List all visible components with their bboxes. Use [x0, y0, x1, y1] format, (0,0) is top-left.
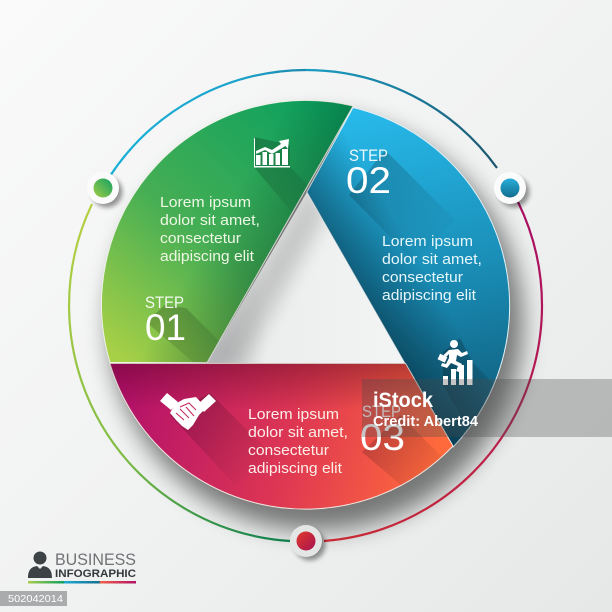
text: step 03 body: adipiscing elit — [248, 461, 342, 477]
long shadow: step 02 — [349, 151, 446, 252]
ring node: blue — [494, 172, 530, 208]
long shadow: handshake icon — [170, 393, 264, 478]
ring node: green — [87, 172, 122, 208]
circle drop shadow — [109, 117, 523, 531]
icon: bar chart — [254, 137, 290, 168]
text: step 01 body: dolor sit amet, — [160, 213, 260, 229]
image id badge — [0, 591, 67, 606]
text: step 02 body: Lorem ipsum — [382, 234, 473, 250]
icon: runner on steps — [438, 340, 472, 385]
icon: businessman — [28, 552, 52, 578]
text: step 02 body: consectetur — [382, 270, 463, 286]
watermark text: iStock — [373, 389, 433, 412]
logo: business infographic — [28, 550, 136, 584]
label: step 03: STEP — [362, 402, 401, 421]
label: step 03 — [360, 402, 405, 458]
long shadow: runner icon — [443, 338, 494, 428]
text: step 03 body: consectetur — [248, 443, 329, 459]
logo text: INFOGRAPHIC — [55, 568, 136, 580]
text: step 02 body: adipiscing elit — [382, 288, 476, 304]
label: step 02: STEP — [349, 146, 388, 165]
panel: step 02 blue — [300, 100, 515, 450]
text: step 01 body: Lorem ipsum — [160, 195, 251, 211]
watermark band — [362, 379, 612, 437]
long shadow: chart icon — [254, 137, 308, 212]
logo text — [55, 550, 136, 580]
text: step 01 body: consectetur — [160, 231, 241, 247]
label: step 01: STEP — [145, 293, 184, 312]
text: step 03 body: dolor sit amet, — [248, 425, 348, 441]
panel: step 01 green — [100, 100, 360, 372]
text: step 03 body: Lorem ipsum — [248, 407, 339, 423]
watermark text: Credit: Abert84 — [373, 413, 479, 430]
outer ring — [69, 70, 542, 541]
long shadow: step 01 — [146, 305, 219, 362]
text: step 01 body: adipiscing elit — [160, 249, 254, 265]
long shadow: step 03 — [362, 415, 442, 485]
watermark text — [373, 389, 479, 430]
label: step 02 — [346, 146, 391, 201]
centre triangle — [208, 192, 404, 363]
ring node: red — [290, 525, 326, 560]
icon: handshake — [160, 393, 216, 430]
colour stripe — [28, 581, 136, 584]
panel: step 03 red — [100, 360, 460, 509]
text: step 02 body: dolor sit amet, — [382, 252, 482, 268]
image id badge: 502042014 — [8, 593, 63, 605]
label: step 03: 03 — [360, 417, 405, 458]
label: step 01: 01 — [145, 307, 186, 348]
logo text: BUSINESS — [55, 550, 136, 569]
label: step 02: 02 — [346, 160, 391, 201]
